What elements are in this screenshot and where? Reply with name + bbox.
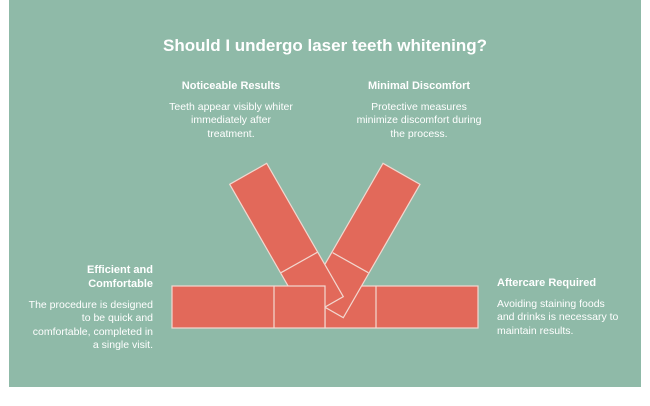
right strip	[306, 163, 420, 318]
text: minimal discomfort	[357, 80, 481, 140]
title: Should I undergo laser teeth whitening?	[163, 36, 487, 55]
text: efficient and comfortable: to be quick and	[82, 312, 153, 324]
text: efficient and comfortable: comfortable, completed in	[33, 326, 153, 338]
text: noticeable results: Teeth appear visibly whiter	[169, 101, 293, 113]
text: efficient and comfortable: a single visit.	[93, 339, 153, 351]
text: noticeable results: immediately after	[191, 114, 271, 126]
left strip	[230, 163, 343, 318]
text: noticeable results: Noticeable Results	[182, 80, 280, 92]
text: minimal discomfort: minimize discomfort during	[357, 114, 481, 126]
text: efficient and comfortable: The procedure is designed	[29, 299, 153, 311]
left bar	[172, 286, 325, 328]
text: noticeable results: treatment.	[207, 128, 255, 140]
text: efficient and comfortable: Comfortable	[88, 278, 153, 290]
text: aftercare required: Aftercare Required	[497, 277, 596, 289]
right bar	[325, 286, 478, 328]
text: minimal discomfort: Minimal Discomfort	[368, 80, 470, 92]
text: efficient and comfortable	[28, 264, 153, 351]
text: minimal discomfort: Protective measures	[371, 101, 467, 113]
text: aftercare required: and drinks is necessary to	[497, 311, 618, 323]
text: noticeable results	[169, 80, 293, 140]
text: minimal discomfort: the process.	[390, 128, 448, 140]
text: aftercare required: Avoiding staining foods	[497, 298, 605, 310]
text: efficient and comfortable: Efficient and	[87, 264, 153, 276]
text: aftercare required	[497, 277, 618, 337]
text: aftercare required: maintain results.	[497, 325, 573, 337]
